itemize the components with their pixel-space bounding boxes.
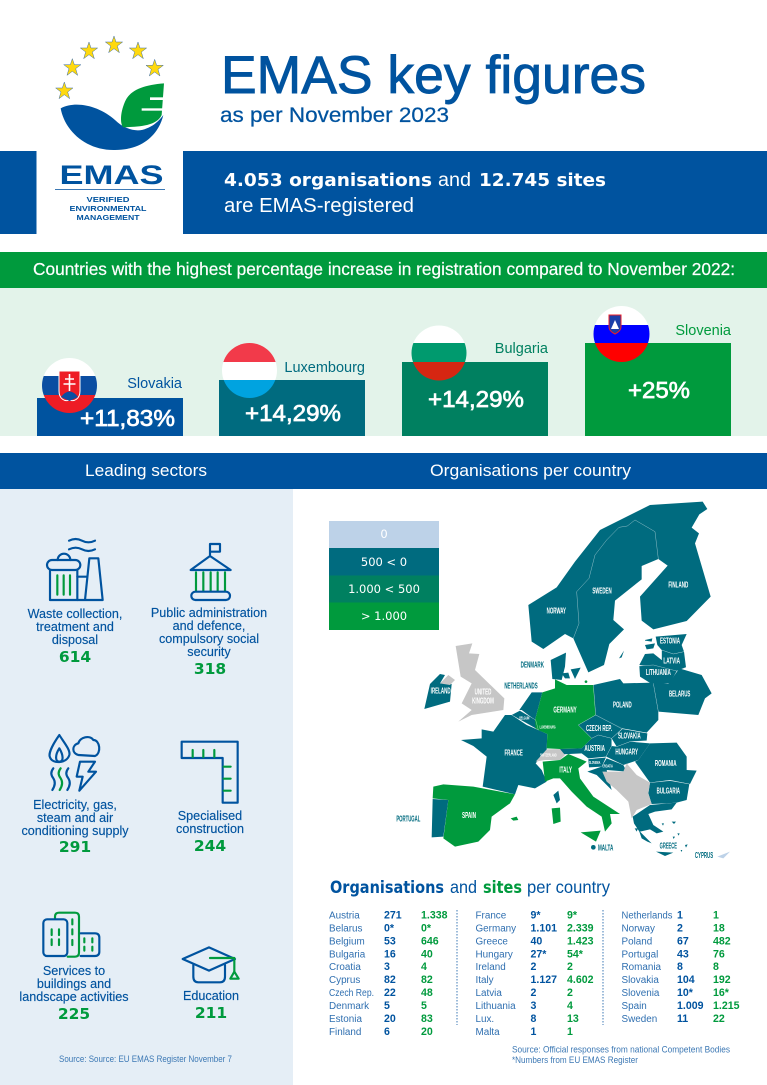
continental Europe xyxy=(396,643,730,860)
table column 2: Lux. xyxy=(476,1014,494,1025)
sector: services to buildings xyxy=(19,913,129,1023)
continental Europe: SWITZERLAND xyxy=(540,753,557,758)
table column 1: 48 xyxy=(421,987,433,999)
sector: specialised construction: construction xyxy=(176,822,244,836)
table column 3: 18 xyxy=(713,922,725,934)
continental Europe: BELGIUM xyxy=(519,716,530,721)
section header band xyxy=(0,453,767,489)
icon: construction square xyxy=(182,742,238,803)
table column 3: 1 xyxy=(677,910,683,922)
Nordic countries: NORWAY xyxy=(547,605,566,615)
table column 2: 1 xyxy=(530,1026,536,1038)
bar: Slovenia: Slovenia xyxy=(675,323,732,339)
section header band: Leading sectors xyxy=(85,461,207,480)
bar: Slovakia xyxy=(37,358,183,436)
sector: specialised construction: 244 xyxy=(194,837,226,855)
table column 2: 2.339 xyxy=(567,922,594,934)
table column 1 xyxy=(329,910,448,1038)
panel: leading sectors xyxy=(0,489,293,1085)
panel: percentage increase bars xyxy=(0,288,767,436)
headline banner xyxy=(183,151,767,234)
table column 2: Malta xyxy=(476,1027,500,1038)
table column 1: Croatia xyxy=(329,962,361,973)
bar: Bulgaria: Bulgaria xyxy=(495,341,549,357)
source note: sectors: Source: Source: EU EMAS Register November 7 xyxy=(59,1054,232,1064)
table column 3: Portugal xyxy=(622,949,658,960)
continental Europe: BELARUS xyxy=(669,689,690,699)
table column 2: Ireland xyxy=(476,962,506,973)
continental Europe: MALTA xyxy=(598,843,614,853)
sector: public administration: and defence, xyxy=(173,619,245,633)
sector: waste collection xyxy=(28,539,122,666)
table column 3: 1.215 xyxy=(713,1000,740,1012)
sector: electricity and gas: conditioning supply xyxy=(21,824,129,838)
sector: waste collection: treatment and xyxy=(36,620,114,634)
table column 2: 2 xyxy=(530,987,536,999)
logo: EMAS: MANAGEMENT xyxy=(76,213,140,222)
Nordic countries xyxy=(528,502,711,672)
table column 3: 22 xyxy=(713,1013,725,1025)
table column 1: Cyprus xyxy=(329,975,360,986)
table column 1: 40 xyxy=(421,948,433,960)
table column 2: 2 xyxy=(567,961,573,973)
sector: public administration xyxy=(151,544,267,678)
continental Europe: LUXEMBOURG xyxy=(540,724,556,729)
table column 2: Germany xyxy=(476,924,516,934)
sector: waste collection: 614 xyxy=(59,648,91,666)
bar: Slovenia: +25% xyxy=(628,377,690,403)
bar: Luxembourg xyxy=(219,343,365,436)
continental Europe: GERMANY xyxy=(553,705,577,715)
table column 2: 9* xyxy=(530,910,541,922)
icon: waste bin and factory xyxy=(47,539,103,600)
logo: EMAS xyxy=(55,36,165,222)
table column 3: Slovenia xyxy=(622,988,660,999)
table column 2: 1.423 xyxy=(567,936,594,948)
icon: buildings xyxy=(43,913,99,957)
continental Europe: GREECE xyxy=(660,841,677,851)
continental Europe: PORTUGAL xyxy=(396,814,421,824)
sector: waste collection: disposal xyxy=(52,633,98,647)
table column 2: 27* xyxy=(530,948,547,960)
table column 3: 10* xyxy=(677,987,694,999)
green heading: Countries with the highest percentage increase in registration compared to November 2022: xyxy=(33,259,735,279)
headline banner: and xyxy=(438,170,471,191)
table column 2: 54* xyxy=(567,948,584,960)
logo: EMAS: VERIFIED xyxy=(86,195,130,204)
table column 1: 646 xyxy=(421,936,439,948)
table column 1: Austria xyxy=(329,910,360,922)
table column 2: 40 xyxy=(530,936,542,948)
table column 1: Belarus xyxy=(329,924,363,934)
sector: public administration: 318 xyxy=(194,660,226,678)
table column 2: 3 xyxy=(530,1000,536,1012)
Baltic states and Denmark: DENMARK xyxy=(521,659,544,669)
icon: graduation cap xyxy=(183,947,239,982)
table column 2: Hungary xyxy=(476,949,513,960)
bar: Bulgaria xyxy=(402,325,549,436)
table column 2: Lithuania xyxy=(476,1001,516,1012)
continental Europe: CROATIA xyxy=(602,763,613,768)
icon: public building with flag xyxy=(191,544,231,600)
table column 2 xyxy=(476,910,594,1038)
source note: table: *Numbers from EU EMAS Register xyxy=(512,1055,638,1065)
continental Europe: BULGARIA xyxy=(657,786,680,796)
continental Europe: KINGDOM xyxy=(472,695,494,705)
header band left xyxy=(0,151,36,234)
continental Europe: ROMANIA xyxy=(655,758,677,768)
section header band: Organisations per country xyxy=(430,461,632,480)
table column 3: 1 xyxy=(713,910,719,922)
sector: public administration: compulsory social xyxy=(159,632,259,646)
table column 3: 192 xyxy=(713,974,731,986)
table column 2: France xyxy=(476,910,507,922)
table heading: sites xyxy=(483,878,522,897)
sector: electricity and gas: steam and air xyxy=(37,811,113,825)
bar: Slovenia xyxy=(585,306,732,436)
table column 1: 82 xyxy=(421,974,433,986)
table column 3: Poland xyxy=(622,936,652,948)
Baltic states and Denmark: LITHUANIA xyxy=(646,667,671,677)
map of Europe xyxy=(396,502,730,860)
continental Europe: CYPRUS xyxy=(695,850,713,860)
table column 3: 11 xyxy=(677,1013,688,1025)
continental Europe: POLAND xyxy=(613,699,632,709)
table heading: and xyxy=(450,877,477,897)
continental Europe: NETHERLANDS xyxy=(504,680,538,690)
sector: electricity and gas xyxy=(21,735,129,856)
table column 2: 1.127 xyxy=(530,974,557,986)
continental Europe: CZECH REP. xyxy=(586,723,612,733)
table column 3: Sweden xyxy=(622,1014,657,1025)
legend: 0 xyxy=(380,527,388,541)
table column 2: 13 xyxy=(567,1013,579,1025)
source note: table xyxy=(512,1044,730,1065)
table column 2: 1.101 xyxy=(530,922,557,934)
table column 2: Greece xyxy=(476,936,508,948)
table column 1: 3 xyxy=(384,961,390,973)
table column 3: 104 xyxy=(677,974,695,986)
table column 3: Netherlands xyxy=(622,910,673,922)
legend xyxy=(329,521,439,630)
sector: services to buildings: landscape activities xyxy=(19,990,129,1004)
continental Europe: SLOVENIA xyxy=(589,760,601,765)
continental Europe: SLOVAKIA xyxy=(618,730,641,740)
table column 1: 83 xyxy=(421,1013,433,1025)
table column 3: 1.009 xyxy=(677,1000,704,1012)
table column 1: 20 xyxy=(421,1026,433,1038)
bar: Bulgaria: +14,29% xyxy=(428,386,524,412)
table column 1: 20 xyxy=(384,1013,396,1025)
table column 1: 5 xyxy=(421,1000,427,1012)
table column 3: Norway xyxy=(622,924,655,934)
logo: EMAS: ENVIRONMENTAL xyxy=(70,204,147,213)
green heading xyxy=(0,252,767,288)
sector: education: 211 xyxy=(195,1004,227,1022)
title: EMAS key figures xyxy=(221,46,646,105)
bar: Luxembourg: Luxembourg xyxy=(284,360,365,376)
continental Europe: HUNGARY xyxy=(615,747,638,757)
table column 1: 6 xyxy=(384,1026,390,1038)
table column 3: 67 xyxy=(677,936,689,948)
table column 2: 2 xyxy=(530,961,536,973)
Nordic countries: SWEDEN xyxy=(592,585,612,595)
table column 1: Bulgaria xyxy=(329,949,366,960)
legend: 1.000 < 500 xyxy=(348,582,420,596)
table column 1: Belgium xyxy=(329,936,365,948)
table column 1: Czech Rep. xyxy=(329,988,374,999)
table column 2: 8 xyxy=(530,1013,536,1025)
continental Europe: FRANCE xyxy=(504,748,523,758)
legend: 500 < 0 xyxy=(361,555,407,569)
table column 3: 8 xyxy=(677,961,683,973)
table column 3: Slovakia xyxy=(622,975,659,986)
logo: EMAS: EMAS xyxy=(60,160,164,190)
table column 2: 4.602 xyxy=(567,974,594,986)
sector: services to buildings: 225 xyxy=(58,1005,90,1023)
headline banner: 12.745 sites xyxy=(479,171,606,191)
legend: > 1.000 xyxy=(361,609,407,623)
sector: services to buildings: Services to xyxy=(43,964,105,978)
continental Europe: AUSTRIA xyxy=(584,743,605,753)
icon: flame, cloud and bolt xyxy=(50,735,99,791)
table column 3: 76 xyxy=(713,948,725,960)
table column 2: 1 xyxy=(567,1026,573,1038)
table column 2: Latvia xyxy=(476,988,502,999)
table column 1: 0* xyxy=(384,922,395,934)
table column 3: Romania xyxy=(622,962,662,973)
table column 3: 482 xyxy=(713,936,731,948)
table column 2: Italy xyxy=(476,975,494,986)
sector: education xyxy=(183,947,239,1022)
table column 1: Estonia xyxy=(329,1014,362,1025)
table column 3: 2 xyxy=(677,922,683,934)
continental Europe: IRELAND xyxy=(431,686,451,696)
bar: Slovakia: +11,83% xyxy=(80,405,175,431)
table column 1: 53 xyxy=(384,936,396,948)
sector: specialised construction: Specialised xyxy=(178,809,242,823)
bar: Luxembourg: +14,29% xyxy=(245,400,341,426)
table column 1: 271 xyxy=(384,910,402,922)
sector: electricity and gas: Electricity, gas, xyxy=(33,798,117,812)
sector: education: Education xyxy=(183,989,239,1003)
continental Europe: ITALY xyxy=(559,764,572,774)
subtitle: as per November 2023 xyxy=(220,103,449,127)
table column 3: 16* xyxy=(713,987,730,999)
table column 1: 82 xyxy=(384,974,396,986)
table column 1: 16 xyxy=(384,948,396,960)
table column 1: 1.338 xyxy=(421,910,448,922)
Baltic states and Denmark xyxy=(521,634,687,685)
headline banner: are EMAS-registered xyxy=(224,195,414,217)
table column 3: 43 xyxy=(677,948,689,960)
headline banner: 4.053 organisations xyxy=(224,171,432,191)
table column 1: 5 xyxy=(384,1000,390,1012)
table column 2: 4 xyxy=(567,1000,573,1012)
sector: electricity and gas: 291 xyxy=(59,838,91,856)
table column 2: 9* xyxy=(567,910,578,922)
sector: public administration: security xyxy=(187,645,231,659)
continental Europe: SPAIN xyxy=(462,810,476,820)
table column 1: Finland xyxy=(329,1027,361,1038)
sector: public administration: Public administration xyxy=(151,606,267,620)
continental Europe: UNITED xyxy=(475,686,491,696)
table column 2: 2 xyxy=(567,987,573,999)
table heading xyxy=(330,877,610,897)
table heading: per country xyxy=(527,877,610,897)
table heading: Organisations xyxy=(330,878,444,897)
Baltic states and Denmark: LATVIA xyxy=(663,655,680,665)
source note: table: Source: Official responses from national Competent Bodies xyxy=(512,1044,730,1054)
table column 1: 22 xyxy=(384,987,396,999)
bar: Slovakia: Slovakia xyxy=(127,376,183,392)
Nordic countries: FINLAND xyxy=(668,579,688,589)
table column 3: Spain xyxy=(622,1001,647,1012)
table column 1: Denmark xyxy=(329,1001,369,1012)
table column 3: 8 xyxy=(713,961,719,973)
Baltic states and Denmark: ESTONIA xyxy=(660,635,680,645)
sector: specialised construction xyxy=(176,742,244,855)
table column 3 xyxy=(622,910,740,1025)
sector: waste collection: Waste collection, xyxy=(28,607,122,621)
table column 1: 4 xyxy=(421,961,427,973)
sector: services to buildings: buildings and xyxy=(37,977,111,991)
table column 1: 0* xyxy=(421,922,432,934)
